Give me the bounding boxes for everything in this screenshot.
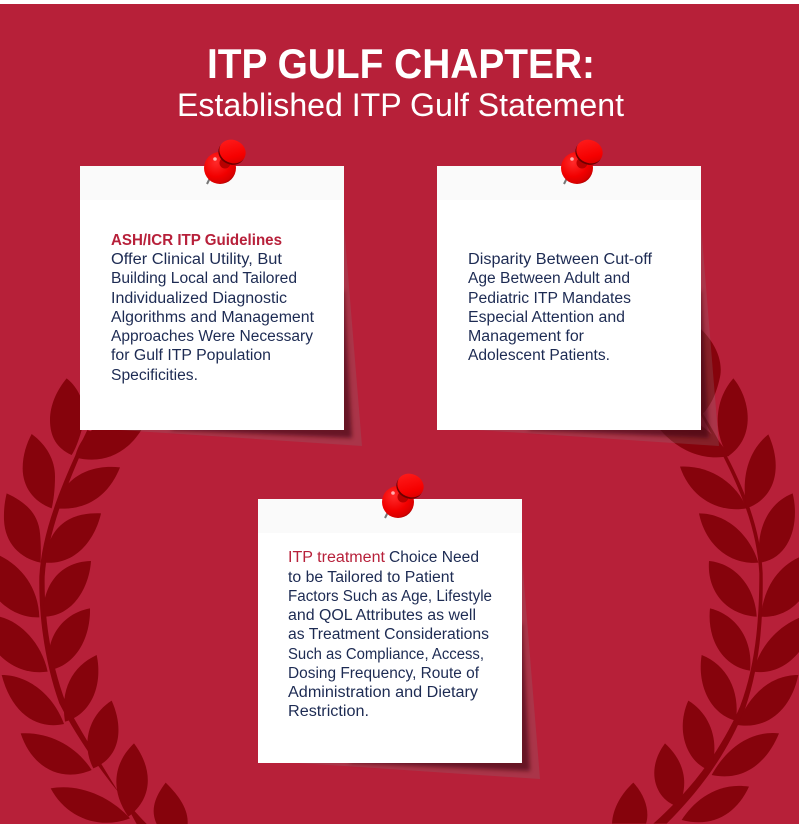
icon: push pin two: [561, 135, 607, 184]
card text: [111, 232, 315, 384]
card text: Choice Need: [389, 549, 479, 566]
card text: Disparity Between Cut-off: [468, 251, 653, 268]
card text: Specificities.: [111, 367, 198, 384]
heading line two: Established ITP Gulf Statement: [177, 87, 624, 123]
card text: Management for: [468, 328, 584, 345]
card text: Individualized Diagnostic: [111, 290, 287, 307]
card text: Algorithms and Management: [111, 309, 315, 326]
card shadow: [120, 225, 362, 446]
card text: Pediatric ITP Mandates: [468, 290, 631, 307]
card text: Factors Such as Age, Lifestyle: [288, 588, 492, 605]
card text: Building Local and Tailored: [111, 270, 297, 287]
card text: Adolescent Patients.: [468, 347, 610, 364]
card text: as Treatment Considerations: [288, 626, 489, 643]
heading line one: ITP GULF CHAPTER:: [207, 40, 595, 87]
card text: Offer Clinical Utility, But: [111, 251, 283, 268]
card header band: [258, 499, 522, 533]
card text: to be Tailored to Patient: [288, 569, 455, 586]
card text: ASH/ICR ITP Guidelines: [111, 232, 282, 249]
card header band: [80, 166, 344, 200]
title: [177, 40, 624, 123]
card text: Dosing Frequency, Route of: [288, 665, 480, 682]
note card: treatment choice: [258, 499, 540, 779]
card text: ITP treatment: [288, 549, 386, 566]
card body: [437, 166, 701, 430]
card text: Restriction.: [288, 703, 369, 720]
card text: Age Between Adult and: [468, 270, 630, 287]
card text: and QOL Attributes as well: [288, 607, 476, 624]
card text: Especial Attention and: [468, 309, 625, 326]
card text: [288, 549, 492, 720]
note card: ASH/ICR guidelines: [80, 166, 362, 446]
left laurel branch: [0, 378, 188, 824]
card body: [258, 499, 522, 763]
card text: [468, 251, 653, 364]
note card: cut-off age disparity: [437, 166, 719, 446]
card header band: [437, 166, 701, 200]
card text: Administration and Dietary: [288, 684, 478, 701]
icon: push pin three: [382, 469, 428, 518]
card shadow: [477, 225, 719, 446]
icon: push pin one: [204, 135, 250, 184]
card text: Such as Compliance, Access,: [288, 646, 484, 663]
card shadow: [298, 558, 540, 779]
card text: for Gulf ITP Population: [111, 347, 271, 364]
right laurel branch: [612, 320, 799, 824]
card body: [80, 166, 344, 430]
card text: Approaches Were Necessary: [111, 328, 313, 345]
